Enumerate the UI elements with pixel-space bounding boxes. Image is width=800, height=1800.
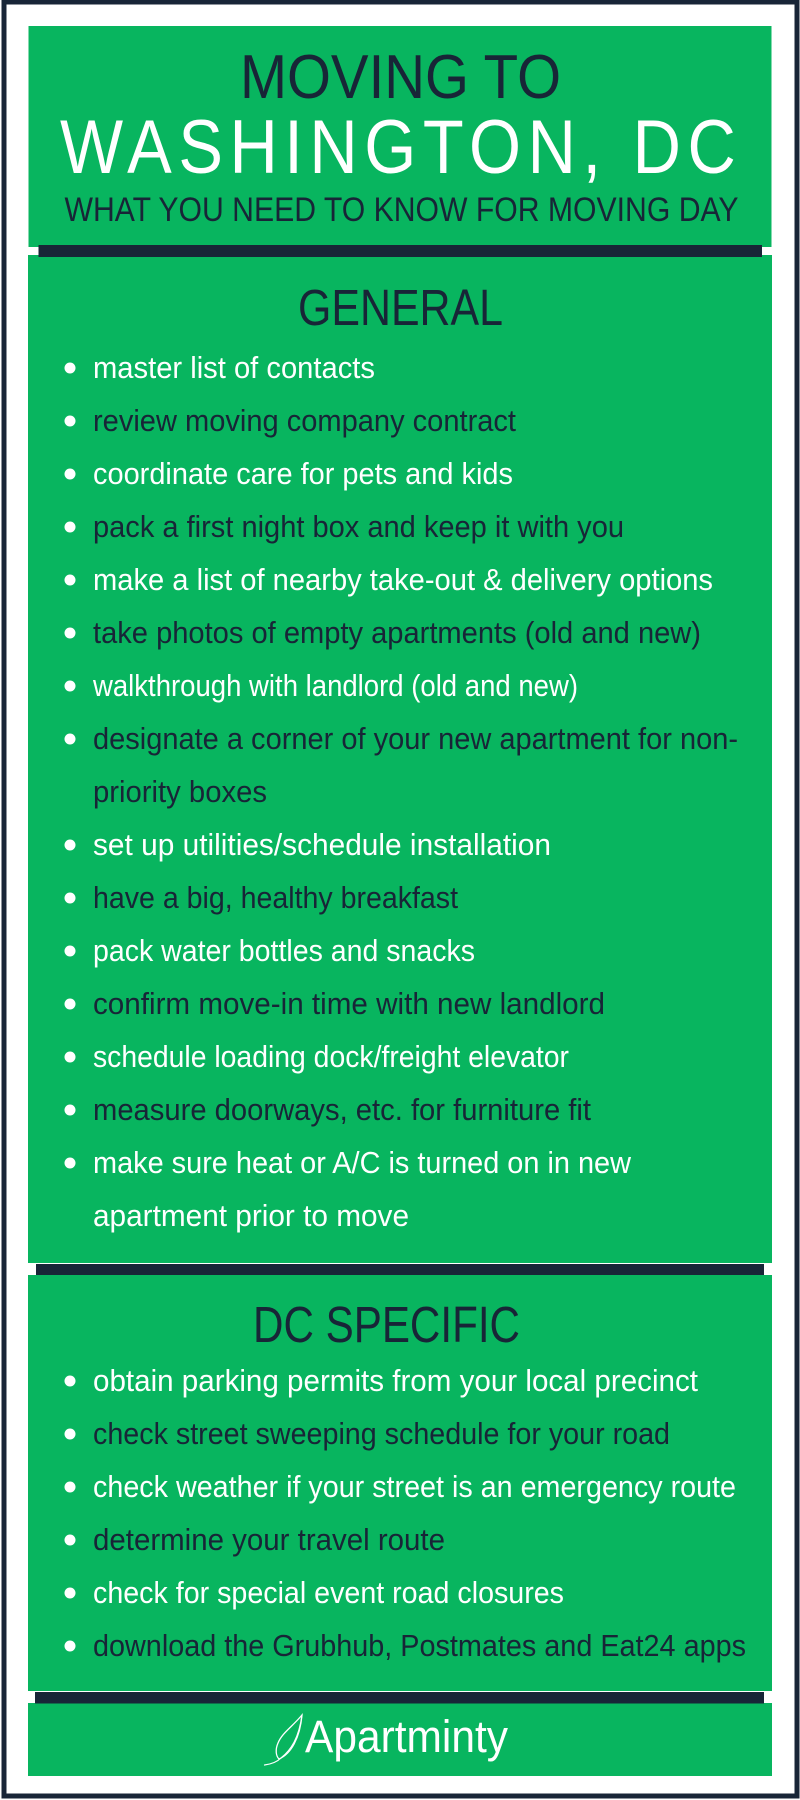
list item: obtain parking permits from your local precinct: [93, 1363, 698, 1398]
list item: make a list of nearby take-out & delivery options: [93, 562, 713, 597]
list item: schedule loading dock/freight elevator: [93, 1039, 569, 1074]
list item: take photos of empty apartments (old and new): [93, 615, 701, 650]
list item: download the Grubhub, Postmates and Eat24 apps: [93, 1628, 746, 1663]
list item: priority boxes: [93, 774, 267, 809]
list item: have a big, healthy breakfast: [93, 880, 458, 915]
logo wordmark: Apartminty: [305, 1711, 508, 1762]
panel: DC specific: [28, 1275, 772, 1691]
list item: check weather if your street is an emergency route: [93, 1469, 736, 1504]
list item: [64, 1145, 632, 1233]
list item: designate a corner of your new apartment for non-: [93, 721, 738, 756]
list item: check street sweeping schedule for your road: [93, 1416, 670, 1451]
list item: set up utilities/schedule installation: [93, 827, 551, 862]
title line: Washington, DC: WASHINGTON, DC: [60, 105, 736, 190]
list item: measure doorways, etc. for furniture fit: [93, 1092, 591, 1127]
divider bar: header: [38, 245, 762, 257]
list item: confirm move-in time with new landlord: [93, 986, 605, 1021]
list item: walkthrough with landlord (old and new): [92, 668, 578, 703]
list item: pack a first night box and keep it with you: [93, 509, 624, 544]
heading: general: GENERAL: [298, 279, 503, 336]
panel: header: [28, 26, 772, 247]
list item: pack water bottles and snacks: [93, 933, 475, 968]
list item: apartment prior to move: [93, 1198, 409, 1233]
list item: determine your travel route: [93, 1522, 445, 1557]
panel: footer: [28, 1703, 772, 1776]
list item: master list of contacts: [93, 350, 375, 385]
title line: moving to: MOVING TO: [240, 43, 561, 112]
heading: DC specific: DC SPECIFIC: [253, 1296, 520, 1353]
divider bar: general: [36, 1264, 764, 1275]
icon: leaf: [264, 1715, 302, 1765]
list item: make sure heat or A/C is turned on in new: [93, 1145, 632, 1180]
list item: [64, 721, 738, 809]
list item: coordinate care for pets and kids: [93, 456, 513, 491]
divider bar: DC specific: [35, 1692, 764, 1704]
panel: general: [28, 255, 772, 1263]
list item: check for special event road closures: [93, 1575, 564, 1610]
list item: review moving company contract: [93, 403, 516, 438]
